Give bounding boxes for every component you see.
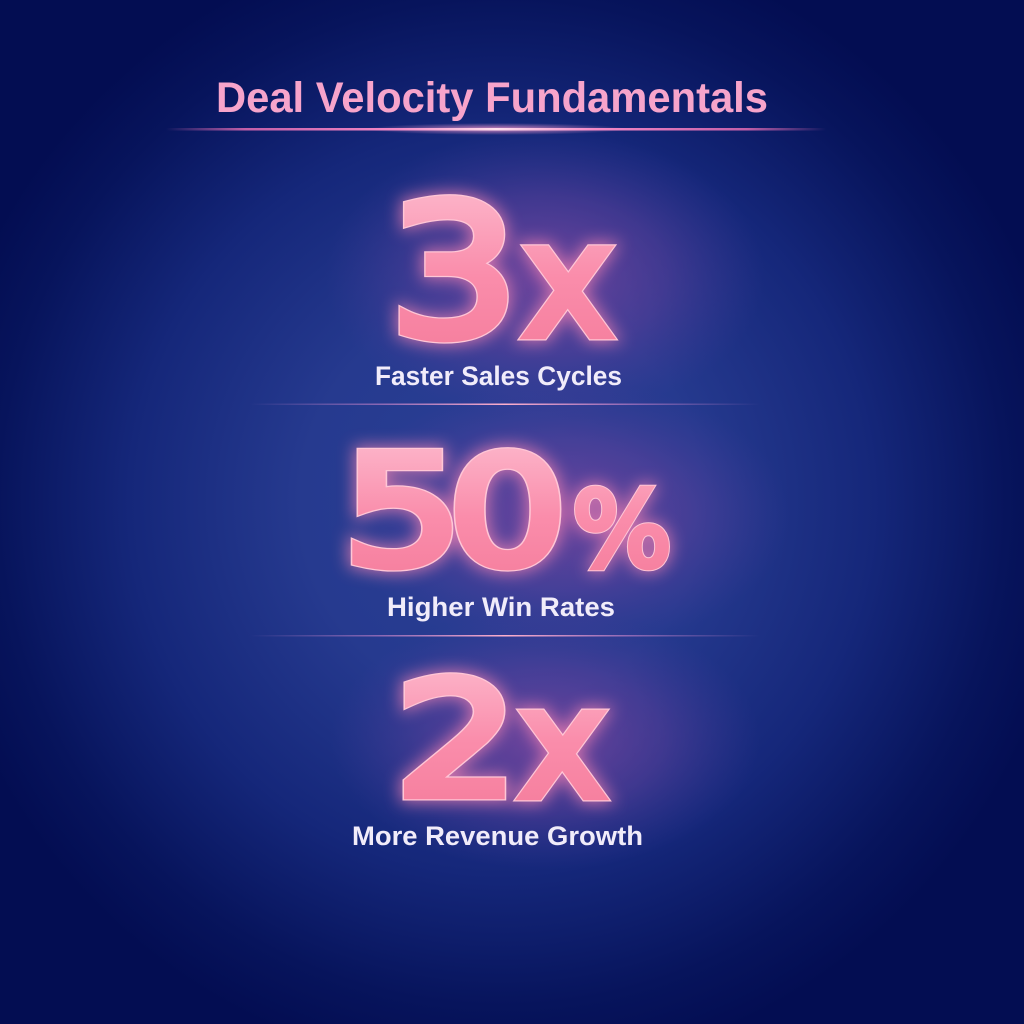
number: 2 bbox=[395, 649, 519, 833]
number rim: 3 bbox=[389, 166, 519, 380]
number rim: % bbox=[572, 469, 672, 591]
number glow: x bbox=[519, 658, 606, 832]
stat: 2x bbox=[395, 649, 606, 833]
number rim bbox=[343, 423, 672, 600]
number: % bbox=[572, 469, 672, 591]
label: more revenue growth: More Revenue Growth bbox=[352, 821, 643, 851]
divider bbox=[250, 404, 760, 405]
number: x bbox=[523, 190, 613, 372]
number: 0 bbox=[448, 426, 567, 600]
number glow: 0 bbox=[448, 426, 567, 600]
number glow: 5 bbox=[343, 423, 463, 600]
number rim: 2 bbox=[395, 649, 519, 833]
label: faster sales cycles: Faster Sales Cycles bbox=[375, 361, 622, 391]
number bbox=[343, 423, 672, 600]
purple glow behind 2x bbox=[330, 610, 760, 870]
number glow: % bbox=[572, 469, 672, 591]
purple glow behind 3x bbox=[325, 130, 765, 420]
number: x bbox=[519, 658, 606, 832]
stat: 3x bbox=[389, 166, 613, 380]
number: 5 bbox=[343, 423, 463, 600]
number glow: 2 bbox=[395, 649, 519, 833]
number glow bbox=[395, 649, 606, 833]
number bbox=[395, 649, 606, 833]
number rim: 0 bbox=[448, 426, 567, 600]
number glow: 3 bbox=[389, 166, 519, 380]
number rim bbox=[395, 649, 606, 833]
divider bbox=[250, 635, 760, 636]
stat: 50% bbox=[343, 423, 672, 600]
number bbox=[389, 166, 613, 380]
label: higher win rates: Higher Win Rates bbox=[387, 592, 615, 622]
number glow: x bbox=[523, 190, 613, 372]
number glow bbox=[343, 423, 672, 600]
number rim bbox=[389, 166, 613, 380]
number: 3 bbox=[389, 166, 519, 380]
number rim: 5 bbox=[343, 423, 463, 600]
title underline bbox=[166, 123, 826, 135]
number rim: x bbox=[519, 658, 606, 832]
number glow bbox=[389, 166, 613, 380]
title: Deal Velocity Fundamentals bbox=[216, 74, 768, 122]
purple glow behind 50% bbox=[340, 380, 790, 650]
number rim: x bbox=[523, 190, 613, 372]
